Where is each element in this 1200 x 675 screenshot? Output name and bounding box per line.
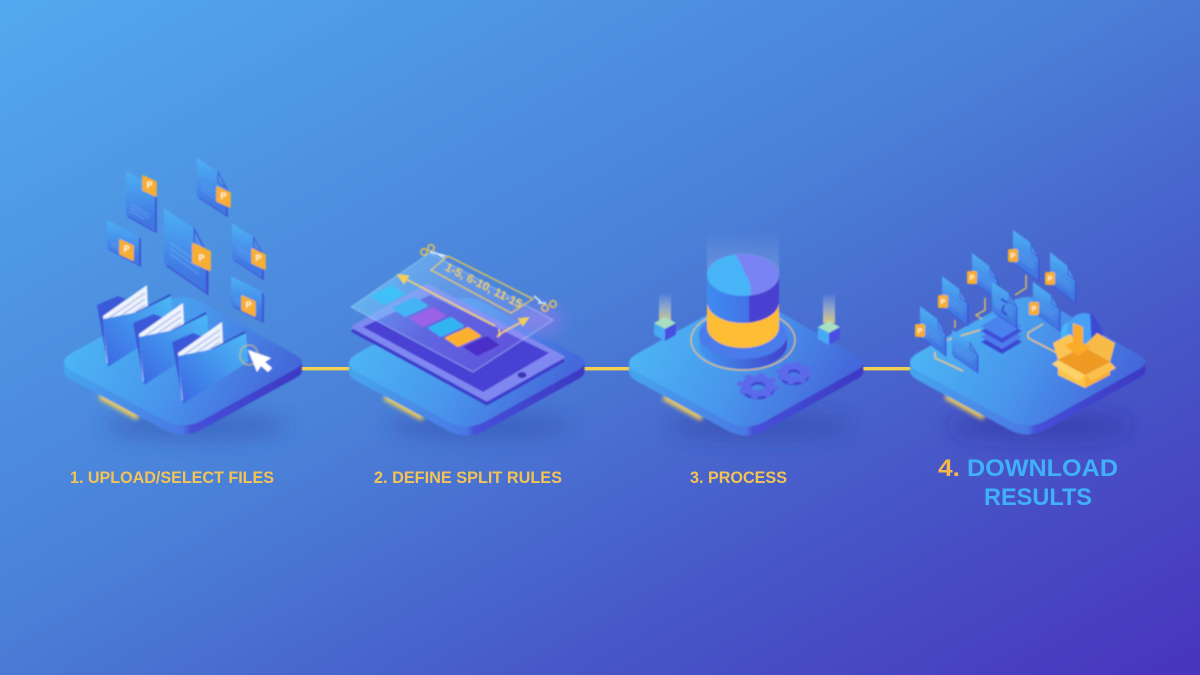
folders xyxy=(97,285,248,404)
yellow under-glow xyxy=(664,397,702,418)
label: step 4 xyxy=(938,455,1118,511)
orbit ring xyxy=(691,310,795,370)
database cylinder xyxy=(707,254,779,348)
floating documents: P xyxy=(123,244,130,254)
tablet xyxy=(353,285,563,404)
open box with download arrow xyxy=(1052,323,1116,388)
yellow under-glow xyxy=(100,396,138,417)
documents network xyxy=(915,230,1076,374)
documents network: P xyxy=(1048,276,1053,283)
documents network: P xyxy=(918,328,923,335)
server stack xyxy=(981,314,1022,354)
floating documents xyxy=(107,158,265,323)
purple glow xyxy=(518,307,562,333)
yellow under-glow xyxy=(946,396,984,417)
platform 2 xyxy=(349,298,585,436)
floating documents: P xyxy=(245,300,252,310)
connector lines between steps xyxy=(298,367,912,370)
floating documents: P xyxy=(255,253,262,263)
platform 4 xyxy=(910,297,1146,434)
cursor xyxy=(240,345,272,372)
step 2 illustration: define split rules xyxy=(349,245,585,441)
platform 3 xyxy=(629,298,863,436)
label: step 4: DOWNLOAD xyxy=(967,455,1118,482)
label: step 4: RESULTS xyxy=(984,484,1092,511)
step 3 illustration: process xyxy=(629,232,863,441)
floating documents: P xyxy=(198,253,205,263)
rule box with page ranges: 1-5, 6-10, 11-15 xyxy=(443,260,525,311)
cubes xyxy=(654,317,840,345)
label: step 3: 3. PROCESS xyxy=(690,468,787,487)
connector traces xyxy=(935,275,1057,371)
documents network: P xyxy=(1011,253,1016,260)
yellow under-glow xyxy=(385,397,423,418)
glass sheet xyxy=(351,253,553,372)
cloud xyxy=(1061,313,1103,350)
scissors xyxy=(421,245,556,311)
label: step 2: 2. DEFINE SPLIT RULES xyxy=(374,468,562,487)
floating documents: P xyxy=(146,180,153,190)
label: step 4: 4. xyxy=(938,455,960,482)
step 1 illustration: upload files xyxy=(64,158,302,441)
step 4 illustration: download results xyxy=(910,230,1146,441)
arrows xyxy=(398,275,528,337)
beams xyxy=(659,232,835,323)
gears xyxy=(740,363,810,397)
documents network: P xyxy=(970,275,975,282)
base disc xyxy=(699,311,787,369)
color blocks xyxy=(372,286,498,355)
documents network: P xyxy=(941,299,946,306)
documents network: P xyxy=(1032,306,1037,313)
platform 1 xyxy=(64,297,302,434)
label: step 1: 1. UPLOAD/SELECT FILES xyxy=(70,468,274,487)
floating documents: P xyxy=(220,191,227,201)
